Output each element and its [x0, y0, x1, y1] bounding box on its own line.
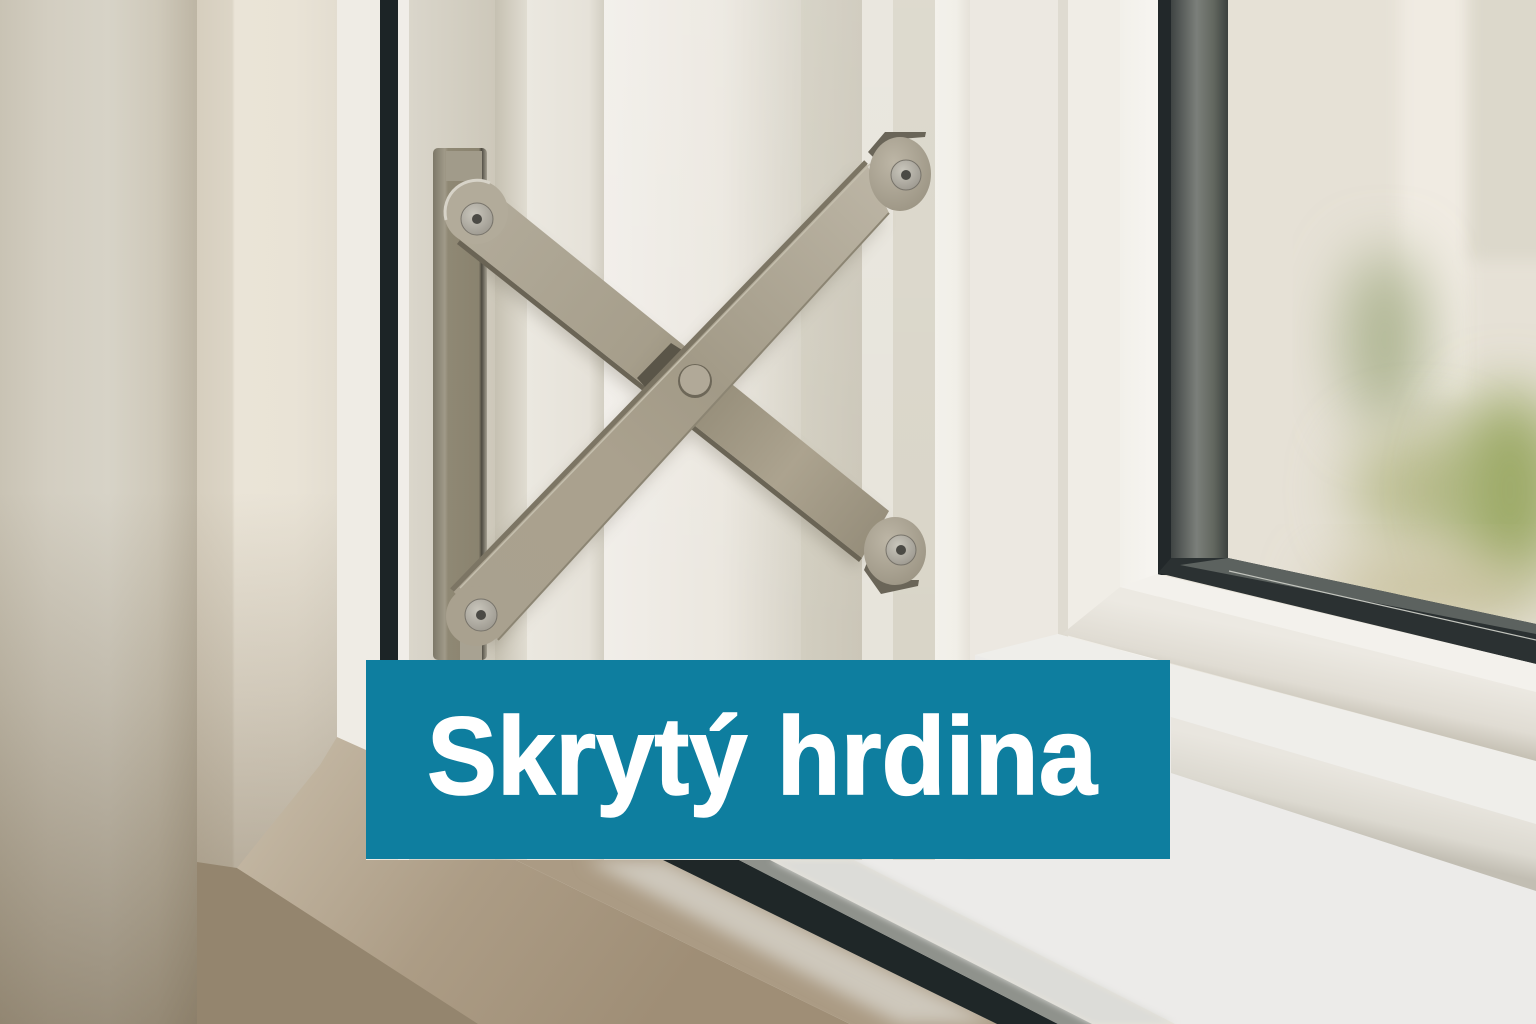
rail face — [1062, 587, 1536, 761]
mounting bracket bottom right — [864, 560, 919, 594]
lower left frame corner — [197, 737, 997, 1024]
lower ledge — [1171, 717, 1536, 891]
dark glazing bead and spacer — [1158, 0, 1536, 664]
black gasket left — [380, 0, 398, 670]
mounting bracket top right — [868, 132, 926, 160]
wall on the left — [0, 0, 197, 1024]
hinge shadow — [446, 172, 883, 650]
diagonal arm: bottom-left to top-right — [446, 162, 889, 646]
mounting disc bottom right — [864, 517, 926, 585]
upper ledge — [975, 634, 1536, 824]
title banner — [366, 660, 1170, 859]
lower shading on wall and frame — [0, 0, 337, 1024]
flat sill board — [854, 634, 1536, 1024]
title text: Skrytý hrdina — [427, 695, 1098, 818]
window glass with blurred garden — [1296, 0, 1536, 624]
screw bottom right — [886, 535, 916, 565]
X-shaped stainless hinge — [433, 132, 931, 660]
mounting disc top right — [869, 137, 931, 211]
diagonal arm: top-left to bottom-right — [444, 180, 889, 562]
screw bottom left — [465, 599, 497, 631]
rail white lip — [1120, 574, 1536, 692]
screw top right — [891, 160, 921, 190]
center pivot rivet — [678, 364, 712, 398]
vertical track — [433, 148, 487, 660]
screw top left — [461, 203, 493, 235]
sill: sash rail, ledges and flat board — [854, 574, 1536, 1024]
dark lower glazing line — [663, 860, 1175, 1024]
window frame vertical profiles — [197, 0, 1158, 1024]
